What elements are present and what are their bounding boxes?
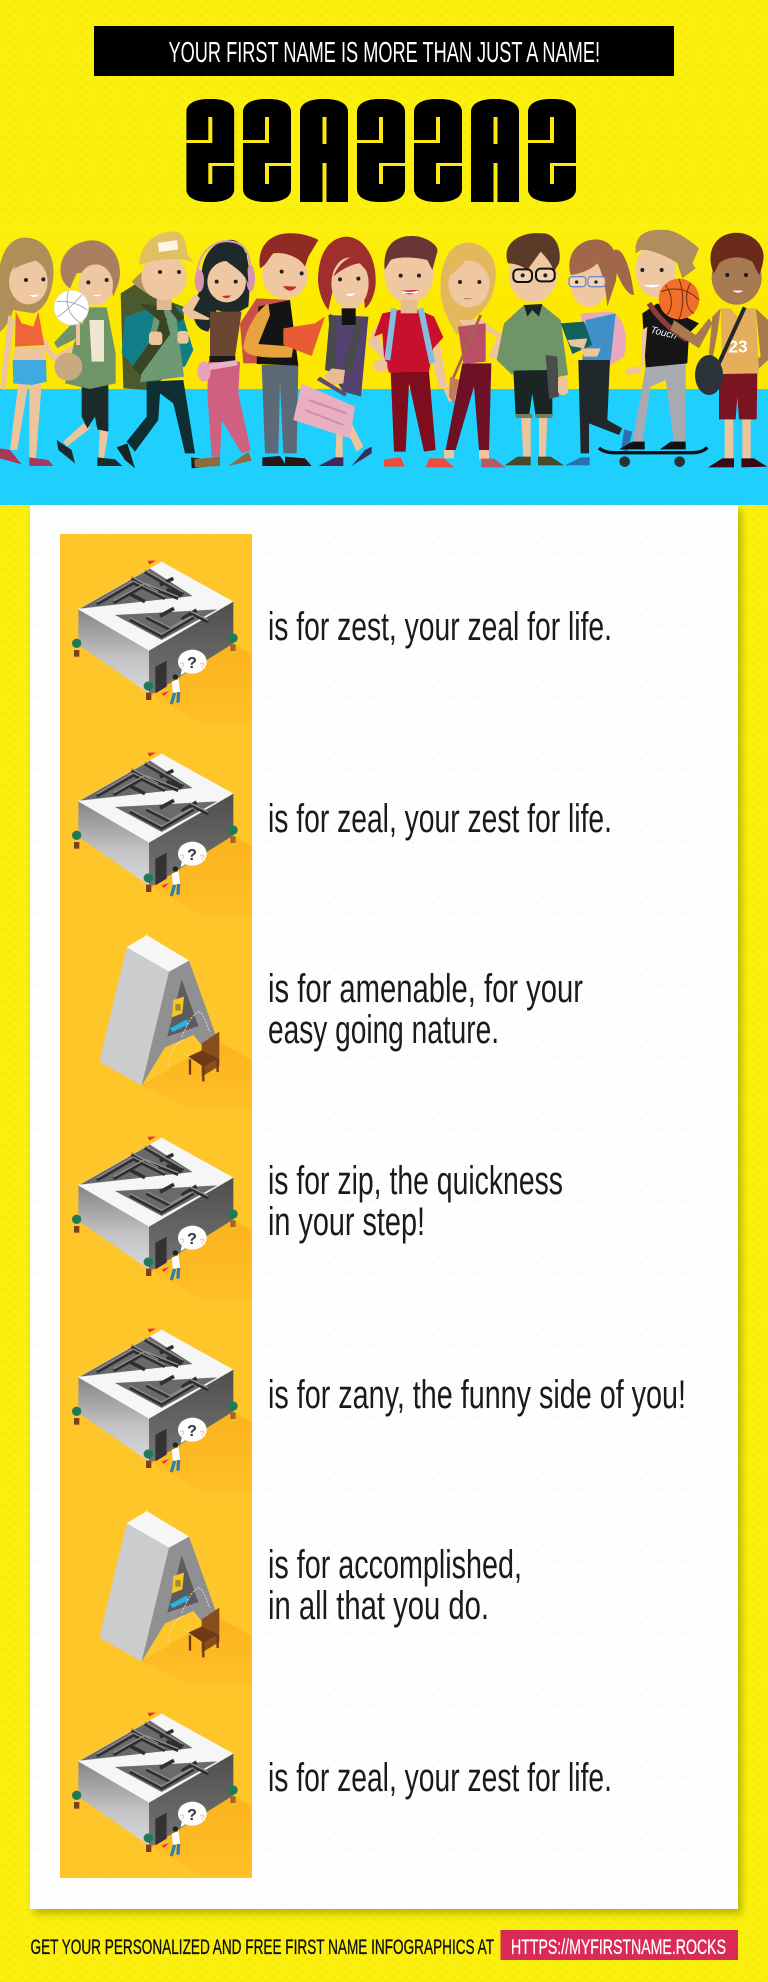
name title: Z bbox=[357, 68, 405, 235]
text: amenable bbox=[268, 967, 583, 1052]
icon: Z maze: ? bbox=[199, 1813, 205, 1823]
student 3: hiker with cap bbox=[117, 231, 207, 468]
student 6: girl with pink bag bbox=[293, 237, 376, 466]
footer call to action: GET YOUR PERSONALIZED AND FREE FIRST NAME INFOGRAPHICS AT bbox=[30, 1935, 494, 1959]
name title: Z bbox=[528, 68, 576, 235]
text: zip bbox=[268, 1159, 563, 1244]
icon: Z maze bbox=[72, 753, 252, 917]
row 7: Z bbox=[72, 1713, 612, 1877]
row 3: A bbox=[99, 935, 583, 1110]
footer link badge bbox=[500, 1930, 738, 1960]
icon: Z maze: ? bbox=[199, 1429, 205, 1439]
text: amenable: easy going nature. bbox=[268, 1008, 499, 1052]
icon: Z maze: ? bbox=[187, 1423, 197, 1440]
row 1: Z bbox=[72, 561, 612, 725]
student 7: boy in red shirt bbox=[367, 236, 454, 467]
header banner bbox=[94, 26, 674, 76]
text: zip: in your step! bbox=[268, 1200, 425, 1244]
student 4: girl with headphones bbox=[182, 240, 255, 467]
footer bbox=[30, 1930, 738, 1960]
student 10: girl with tablet and ponytail bbox=[561, 239, 634, 465]
icon: Z maze bbox=[72, 1713, 252, 1877]
icon: Z maze: ? bbox=[179, 1813, 185, 1823]
icon: Z maze: ? bbox=[187, 847, 197, 864]
name title: Z bbox=[186, 68, 234, 235]
name title: Z bbox=[414, 68, 462, 235]
text: zip: is for zip, the quickness bbox=[268, 1159, 563, 1203]
icon: Z maze: ? bbox=[187, 1807, 197, 1824]
icon: Z maze: ? bbox=[179, 661, 185, 671]
shirt lettering: Touch bbox=[649, 325, 678, 342]
icon: Z maze: ? bbox=[179, 1237, 185, 1247]
hero band with students bbox=[0, 222, 768, 505]
student 11: skateboarder with basketball bbox=[599, 230, 712, 467]
icon: Z maze: ? bbox=[179, 853, 185, 863]
text: accomplished bbox=[268, 1543, 522, 1628]
student 2: girl with volleyball bbox=[54, 240, 122, 466]
text: accomplished: in all that you do. bbox=[268, 1584, 489, 1628]
icon: letter A with chair bbox=[99, 1511, 252, 1686]
text: zeal: is for zeal, your zest for life. bbox=[268, 797, 612, 841]
text: zeal: is for zeal, your zest for life. bbox=[268, 1756, 612, 1800]
jersey number: 23 bbox=[728, 337, 748, 357]
text: accomplished: is for accomplished, bbox=[268, 1543, 522, 1587]
name title: Z bbox=[243, 68, 291, 235]
text: zest: is for zest, your zeal for life. bbox=[268, 605, 612, 649]
text: amenable: is for amenable, for your bbox=[268, 967, 583, 1011]
row 5: Z bbox=[72, 1329, 686, 1493]
student 9: boy with glasses bbox=[497, 233, 568, 465]
icon: Z maze: ? bbox=[199, 661, 205, 671]
name title: A bbox=[296, 68, 352, 235]
icon: Z maze: ? bbox=[199, 853, 205, 863]
row 4: Z bbox=[72, 1137, 563, 1301]
name title bbox=[186, 99, 576, 202]
orange letter column bbox=[60, 534, 252, 1878]
icon: Z maze bbox=[72, 1137, 252, 1301]
student 1: girl in orange top bbox=[0, 238, 80, 466]
icon: Z maze bbox=[72, 1329, 252, 1493]
row 6: A bbox=[99, 1511, 522, 1686]
icon: Z maze: ? bbox=[187, 1231, 197, 1248]
content panel bbox=[30, 505, 742, 1914]
icon: Z maze: ? bbox=[199, 1237, 205, 1247]
student 5: boy with red book bbox=[240, 233, 325, 466]
icon: Z maze: ? bbox=[187, 655, 197, 672]
row 2: Z bbox=[72, 753, 612, 917]
student 8: blonde girl bbox=[440, 243, 507, 467]
student 12: boy in jersey bbox=[695, 233, 768, 467]
name title: A bbox=[467, 68, 523, 235]
icon: letter A with chair bbox=[99, 935, 252, 1110]
icon: Z maze bbox=[72, 561, 252, 725]
icon: Z maze: ? bbox=[179, 1429, 185, 1439]
